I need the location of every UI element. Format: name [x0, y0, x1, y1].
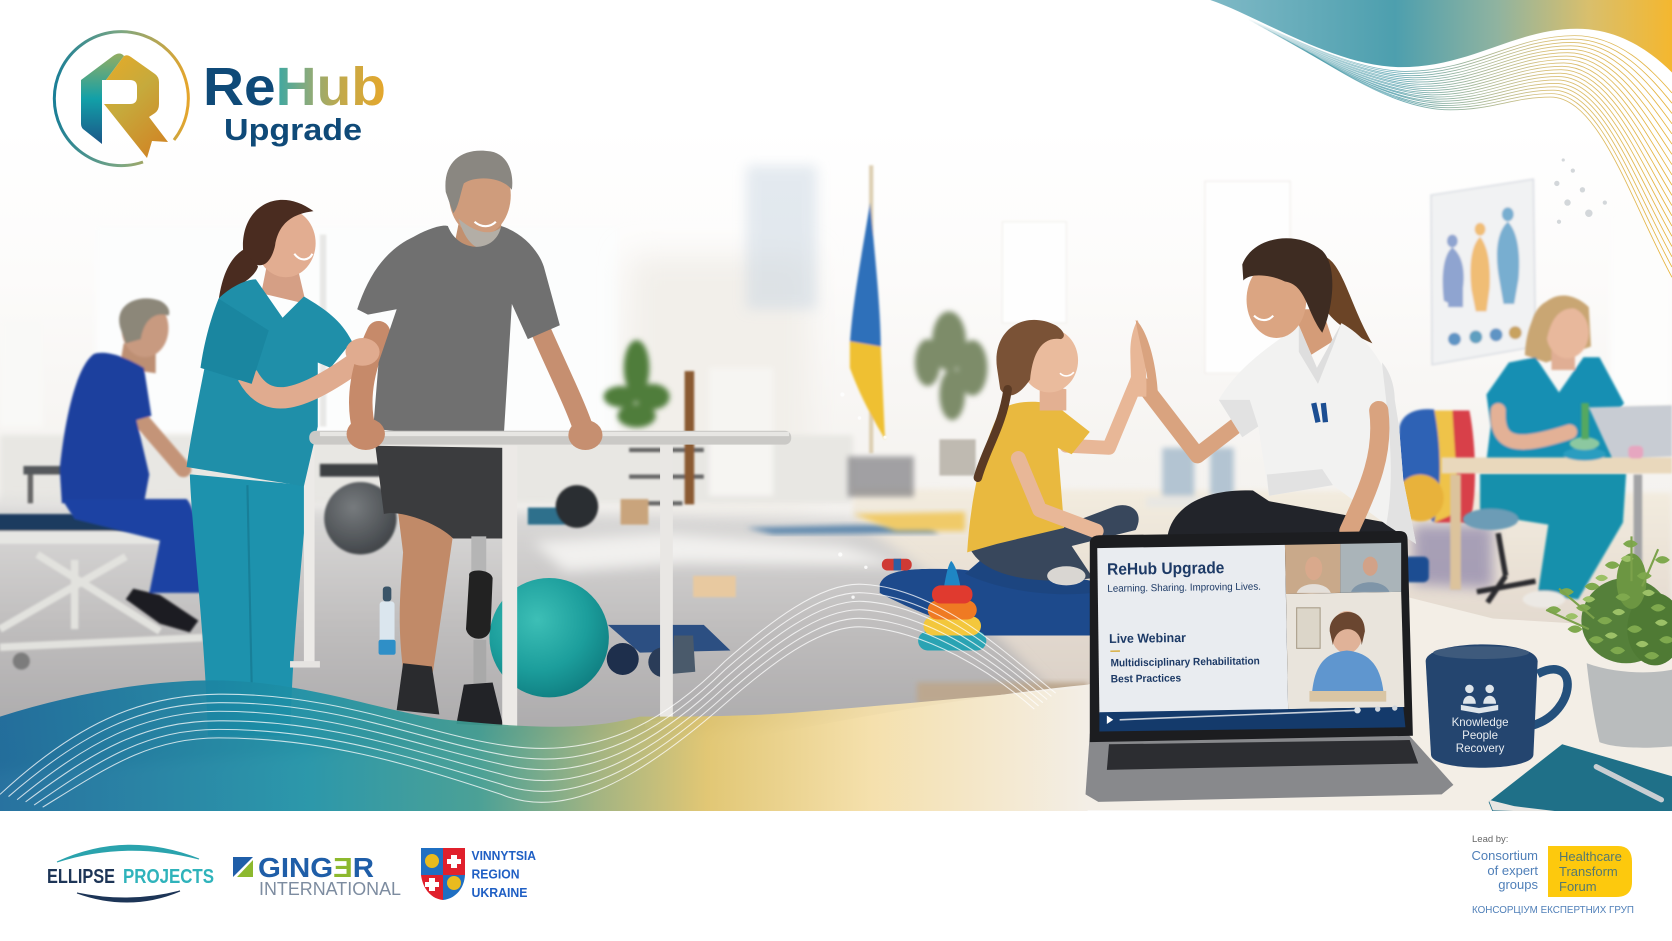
parallel bars — [290, 431, 791, 727]
logo: consortium lead: Consortium — [1472, 848, 1538, 863]
floor — [0, 488, 1672, 727]
dots particles top right — [1554, 158, 1607, 224]
high five hands — [1130, 320, 1158, 397]
mug icon — [1461, 685, 1498, 713]
laptop base — [1086, 734, 1453, 802]
notebook — [1489, 744, 1672, 813]
stacking ring toy — [882, 559, 986, 650]
pen — [1596, 767, 1661, 800]
laptop — [1086, 531, 1453, 802]
wall cushions — [1397, 409, 1475, 523]
nurse hand on patient arm — [345, 338, 380, 366]
background gym equipment — [23, 371, 704, 528]
sparkle dots — [838, 392, 887, 599]
treatment table — [0, 514, 203, 670]
logo: consortium lead: Transform — [1559, 864, 1618, 879]
coat of arms — [421, 848, 465, 900]
patient with prosthetic leg — [357, 151, 584, 726]
flag of Ukraine — [850, 165, 885, 453]
logo: Vinnytsia Region — [421, 848, 536, 900]
slide text: Best Practices — [1111, 672, 1181, 685]
plant: centre background — [848, 311, 987, 497]
desk with laptop — [1442, 403, 1672, 590]
mug — [1426, 644, 1568, 768]
top-right wave shape — [1210, 0, 1672, 73]
logo: Vinnytsia Region: VINNYTSIA — [472, 849, 536, 863]
girl — [967, 320, 1139, 585]
laptop screen bezel — [1090, 531, 1413, 742]
logo: ReHub Upgrade — [54, 32, 386, 166]
mug text: People — [1462, 730, 1498, 742]
logo: consortium lead: groups — [1498, 877, 1538, 892]
teal exercise ball — [489, 578, 609, 697]
room backdrop — [0, 162, 1672, 600]
nurse in teal — [187, 200, 368, 736]
slide text: Multidisciplinary Rehabilitation — [1110, 655, 1260, 669]
plant pot — [1587, 663, 1672, 748]
slide text — [1107, 558, 1262, 685]
logo: consortium lead: Forum — [1559, 879, 1597, 894]
logo: Vinnytsia Region: REGION — [472, 868, 520, 882]
slide text: Live Webinar — [1109, 630, 1186, 646]
logo: Ginger International: GINGƎR — [258, 852, 374, 883]
slide text: Learning. Sharing. Improving Lives. — [1107, 582, 1261, 595]
logo: consortium lead: КОНСОРЦІУМ ЕКСПЕРТНИХ ГРУП — [1472, 904, 1634, 916]
table surface — [998, 598, 1586, 716]
video control bar — [1099, 705, 1405, 732]
footer band — [0, 811, 1672, 941]
mug text: Knowledge — [1452, 717, 1509, 729]
water bottle — [379, 586, 396, 655]
mug text: Recovery — [1456, 743, 1505, 755]
logo: consortium lead: Healthcare — [1559, 849, 1622, 864]
wall poster: anatomy — [1431, 179, 1536, 365]
blonde staff at desk — [1463, 296, 1626, 608]
yellow forum badge — [1548, 846, 1632, 897]
icon: ring — [54, 32, 188, 166]
dark exercise ball — [324, 482, 397, 554]
bottom wave lines — [0, 584, 1056, 807]
therapist in blue at table — [60, 298, 203, 632]
logo: Vinnytsia Region: UKRAINE — [472, 886, 528, 900]
logo wordmark: ReHub — [203, 57, 386, 117]
video tile: man — [1340, 543, 1401, 593]
top-right wave lines — [1225, 7, 1672, 277]
slide text: ReHub Upgrade — [1107, 558, 1224, 579]
logo: consortium lead — [1472, 834, 1634, 916]
video tile: woman — [1285, 544, 1340, 594]
back parallel bar post — [304, 510, 314, 662]
logo: consortium lead: Lead by: — [1472, 834, 1508, 845]
therapist in white polo — [1144, 238, 1416, 544]
slide panel — [1097, 545, 1288, 713]
logo: Ginger International — [233, 852, 401, 899]
plant: left background — [604, 340, 670, 428]
video tile: presenter — [1286, 592, 1404, 709]
child's mat — [880, 557, 1429, 636]
video people — [1297, 557, 1389, 702]
laptop keyboard — [1107, 740, 1418, 770]
logo: Ellipse Projects: PROJECTS — [123, 866, 214, 888]
logo: Ginger International: INTERNATIONAL — [259, 879, 401, 899]
icon: R ribbon — [81, 54, 168, 158]
logo: Ellipse Projects: ELLIPSE — [47, 866, 115, 888]
patient hands on bar — [347, 418, 602, 450]
logo: Ellipse Projects — [47, 845, 214, 902]
bottom wave shape — [0, 680, 1088, 811]
plant foliage — [1546, 536, 1672, 665]
logo subtitle: Upgrade — [224, 112, 362, 147]
mat and small balls — [607, 576, 736, 677]
blurred chair behind therapist — [1150, 445, 1237, 504]
mug text — [1452, 717, 1509, 755]
logo: consortium lead: of expert — [1487, 863, 1538, 878]
